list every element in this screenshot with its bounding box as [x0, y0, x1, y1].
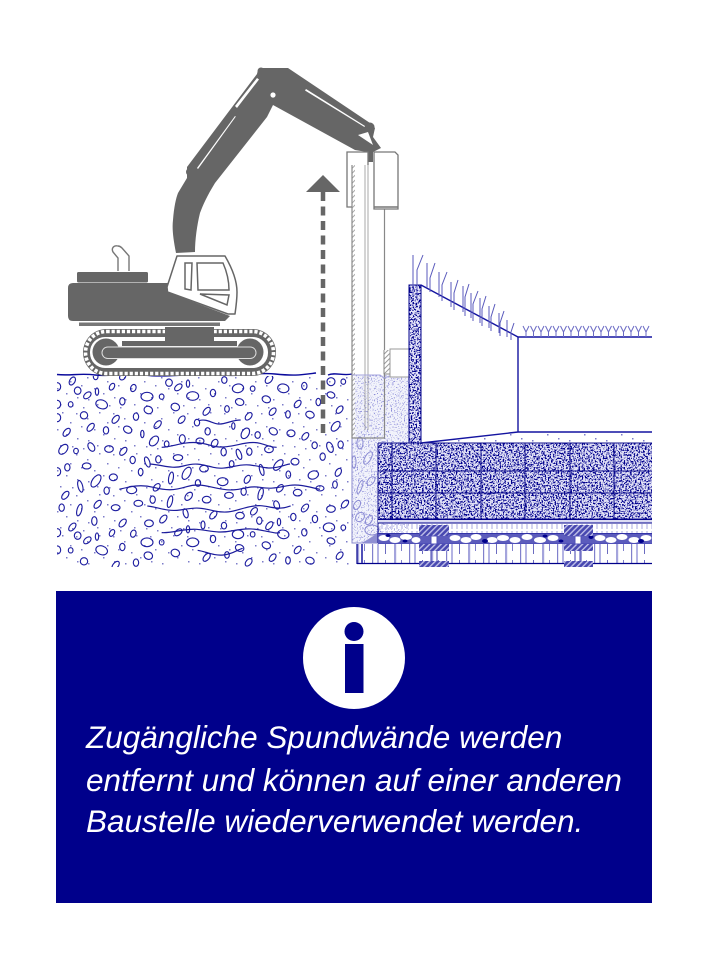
gravel layer [378, 534, 652, 544]
steel beam left [419, 525, 449, 567]
second pile section [384, 349, 409, 377]
basement wall speckled [409, 285, 421, 443]
floor fill layer [421, 432, 652, 443]
crawler track [83, 327, 276, 376]
soil ground with stones [54, 372, 352, 571]
excavation outline [421, 285, 652, 443]
engine cover [77, 272, 148, 282]
ground surface line [57, 373, 352, 376]
foundation slab speckled [378, 443, 652, 543]
info panel [56, 591, 652, 903]
grass on slope [413, 255, 514, 340]
excavator body [68, 283, 230, 321]
sheet pile [352, 163, 390, 438]
grass on flat ground [523, 326, 649, 337]
excavator exhaust [112, 246, 129, 271]
excavator cab [167, 256, 237, 314]
steel beam right [564, 525, 593, 567]
concrete in excavation behind pile [352, 375, 409, 543]
info text [85, 719, 622, 839]
excavator [68, 68, 381, 376]
groundwater wavy lines [119, 420, 320, 555]
extraction arrow [306, 175, 340, 437]
clamp left jaw [347, 152, 368, 207]
arm hinges [186, 68, 374, 176]
info text: entfernt und können auf einer anderen [86, 762, 622, 798]
icon: information [303, 607, 405, 709]
sheet pile with clamp [347, 152, 409, 438]
building section [357, 255, 652, 567]
clamp right jaw [374, 152, 398, 209]
info text: Baustelle wiederverwendet werden. [86, 803, 583, 839]
piled base with vertical lines [357, 544, 652, 564]
excavator boom and arm [173, 68, 381, 253]
info text: Zugängliche Spundwände werden [86, 719, 562, 755]
boom highlights [197, 78, 373, 169]
undercarriage strip [79, 322, 220, 326]
illustration: sheet pile extraction [56, 68, 652, 567]
sealing layers [378, 519, 652, 534]
